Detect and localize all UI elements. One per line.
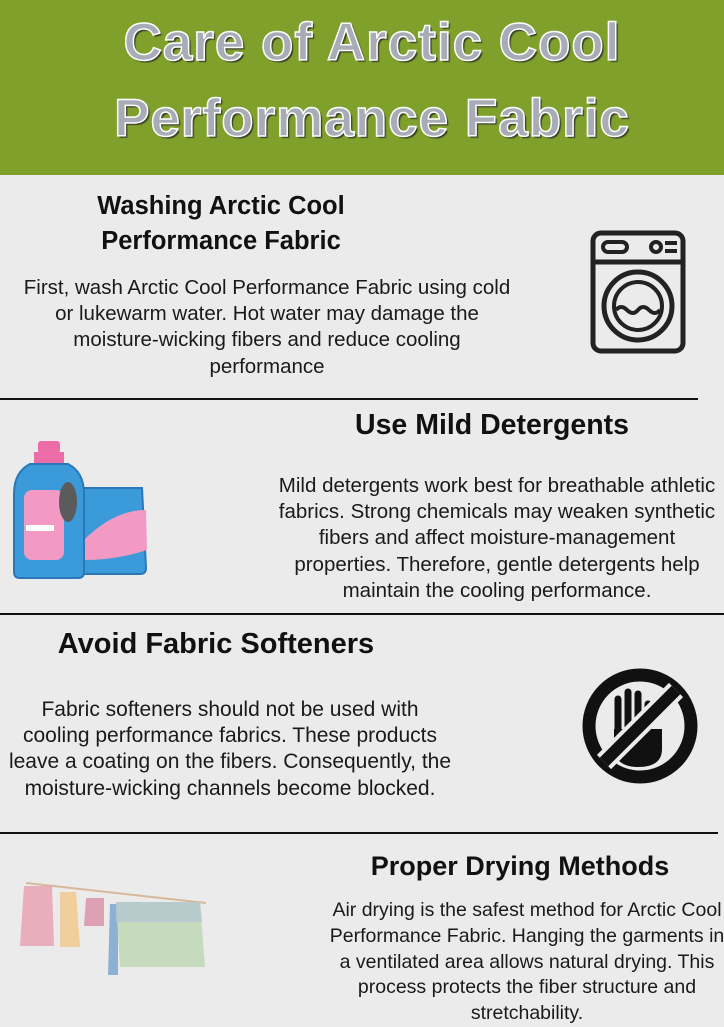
icon: no hand <box>582 668 698 784</box>
text: detergents: fabrics. Strong chemicals may weaken synthetic <box>279 500 715 523</box>
text: softeners: Fabric softeners should not be used with <box>41 698 419 721</box>
text: softeners: moisture-wicking channels become blocked. <box>25 777 435 800</box>
heading: detergents: Use Mild Detergents <box>355 409 629 441</box>
title: Care of Arctic Cool <box>123 13 621 72</box>
text: drying <box>330 899 724 1024</box>
text: detergents: maintain the cooling performance. <box>343 579 651 602</box>
text: detergents: properties. Therefore, gentle detergents help <box>294 553 700 576</box>
heading: drying: Proper Drying Methods <box>371 851 669 881</box>
panel: washing <box>24 192 686 378</box>
heading: washing: Performance Fabric <box>101 227 341 255</box>
text: drying: Performance Fabric. Hanging the garments in <box>330 925 724 947</box>
heading: softeners: Avoid Fabric Softeners <box>58 628 374 660</box>
text: detergents: fibers and affect moisture-management <box>319 526 675 549</box>
text: softeners <box>9 698 451 800</box>
text: drying: Air drying is the safest method for Arctic Cool <box>332 899 722 921</box>
text: drying: a ventilated area allows natural drying. This <box>340 951 714 973</box>
icon: washing machine <box>590 230 686 354</box>
text: washing: performance <box>209 355 325 378</box>
text: drying: process protects the fiber structure and <box>358 976 696 998</box>
panel: detergents <box>13 409 715 602</box>
text: softeners: leave a coating on the fibers. Consequently, the <box>9 750 451 773</box>
text: washing <box>24 276 510 378</box>
panel: softeners <box>9 628 698 800</box>
title banner <box>0 0 724 175</box>
text: softeners: cooling performance fabrics. These products <box>23 724 437 747</box>
text: washing: First, wash Arctic Cool Performance Fabric using cold <box>24 276 510 299</box>
text: detergents: Mild detergents work best for breathable athletic <box>279 474 715 497</box>
title: Performance Fabric <box>114 89 630 148</box>
text: washing: moisture-wicking fibers and reduce cooling <box>73 328 461 351</box>
text: drying: stretchability. <box>471 1002 583 1024</box>
icon: detergent <box>13 441 147 579</box>
panel: drying <box>20 851 724 1024</box>
icon: clothesline <box>20 882 206 975</box>
heading: washing <box>97 192 345 255</box>
heading: washing: Washing Arctic Cool <box>97 192 345 220</box>
title <box>114 13 630 148</box>
text: detergents <box>279 474 715 602</box>
text: washing: or lukewarm water. Hot water may damage the <box>55 302 479 325</box>
